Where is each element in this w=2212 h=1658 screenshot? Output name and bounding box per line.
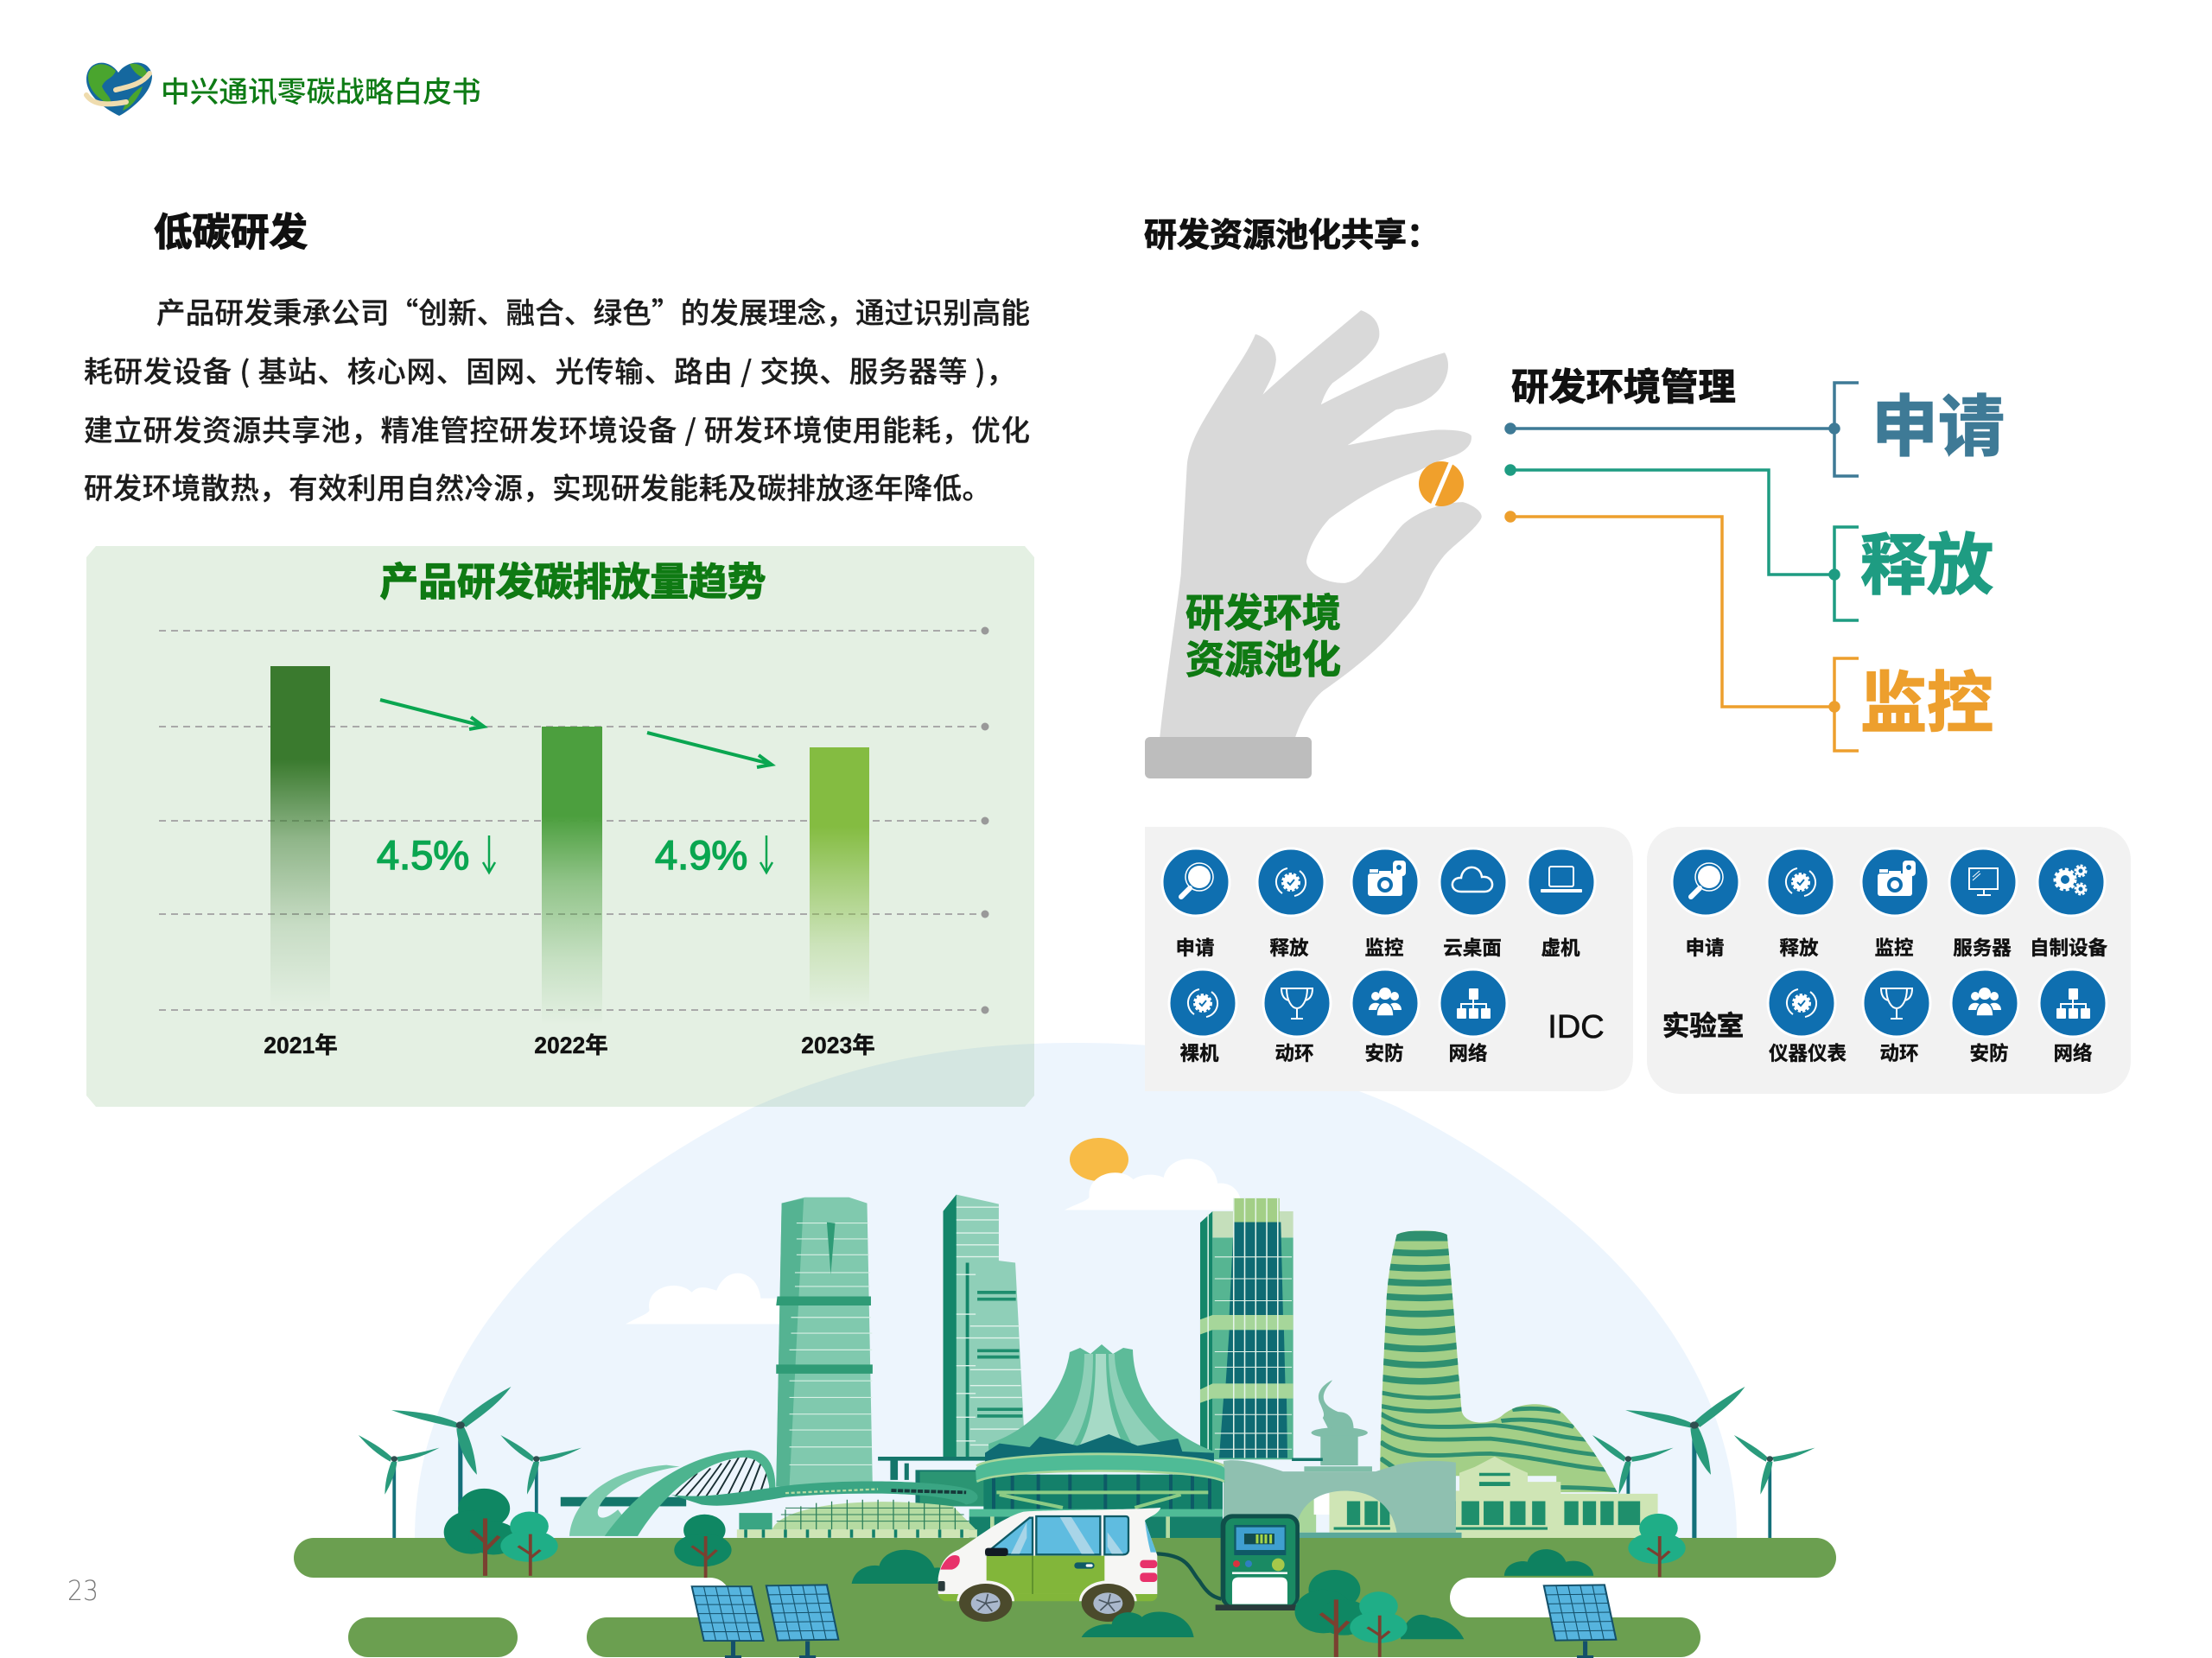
panel: IDC resource icons [1145, 827, 1633, 1091]
icon: elephant monument [1304, 1380, 1372, 1471]
panel: laboratory resource icons: 服务器 [1953, 937, 2012, 959]
foreground objects left [444, 1489, 955, 1657]
diagram: hand holding pill with management branches [1145, 310, 2005, 778]
report title: 中兴通讯零碳战略白皮书 [161, 76, 481, 109]
building: tower one [776, 1197, 873, 1487]
branch: monitor [1506, 512, 1993, 751]
icon: tree [674, 1515, 732, 1578]
panel: laboratory resource icons: 仪器仪表 [1769, 1043, 1847, 1064]
right skyline buildings [1200, 1198, 1658, 1539]
left skyline background [359, 1195, 1024, 1538]
icon: tree group [444, 1489, 558, 1576]
icon: hand [1160, 310, 1482, 739]
hall ring and colonnade [969, 1434, 1224, 1538]
icon: bushes [1401, 1549, 1593, 1639]
hall back beam [878, 1457, 1033, 1506]
body paragraph: 研发环境散热，有效利用自然冷源，实现研发能耗及碳排放逐年降低。 [84, 465, 991, 507]
arrow: 2021 to 2022 [380, 700, 484, 729]
chart: product R&D carbon emission bars [159, 562, 988, 1058]
bar: 2022 [542, 727, 602, 1025]
bridge beam [561, 1497, 686, 1506]
branch: apply [1506, 383, 2005, 476]
page number: 23 [67, 1574, 99, 1607]
panel: IDC resource icons: 释放 [1269, 937, 1309, 959]
panel: laboratory resource icons: 释放 [1779, 937, 1819, 959]
arrow: 2022 to 2023 [647, 733, 772, 767]
axis label: 2022: 2022年 [534, 1032, 608, 1058]
icon: bush [852, 1550, 955, 1584]
icon: sun [1070, 1138, 1128, 1181]
chart title: 产品研发碳排放量趋势 [380, 562, 766, 604]
header logo and report title [86, 62, 481, 116]
building: striped tower [1371, 1226, 1627, 1494]
car and charger [938, 1508, 1300, 1637]
heading: low-carbon R&D: 低碳研发 [154, 212, 308, 254]
bar: 2023 [810, 747, 869, 1011]
icon: tree group front [1294, 1570, 1408, 1657]
panel: laboratory resource icons: 自制设备 [2030, 937, 2107, 959]
foreground objects right [1294, 1514, 1686, 1657]
icon: wind turbines left [359, 1387, 582, 1538]
body paragraph: 耗研发设备 ( 基站、核心网、固网、光传输、路由 / 交换、服务器等 )， [84, 348, 1015, 391]
panel: laboratory resource icons: 监控 [1874, 937, 1914, 959]
body paragraph [84, 289, 1030, 507]
panel: laboratory resource icons: 动环 [1879, 1043, 1919, 1064]
building: glass tower [1200, 1198, 1294, 1459]
heading: R&D resource pooling: 研发资源池化共享： [1144, 218, 1440, 254]
panel: carbon emission trend background [86, 546, 1034, 1107]
panel: laboratory resource icons [1647, 827, 2131, 1094]
axis label: 2023: 2023年 [801, 1032, 875, 1058]
icon: left cloud [626, 1274, 780, 1324]
panel: IDC resource icons: 监控 [1364, 937, 1404, 959]
label: IDC: IDC [1548, 1009, 1605, 1045]
body paragraph: 建立研发资源共享池，精准管控研发环境设备 / 研发环境使用能耗，优化 [84, 407, 1030, 449]
label: resource pool: 研发环境 [1185, 591, 1341, 635]
body paragraph: 产品研发秉承公司“创新、融合、绿色”的发展理念，通过识别高能 [156, 289, 1030, 332]
panel: IDC resource icons: 申请 [1175, 937, 1215, 959]
building: convention hall [878, 1344, 1224, 1538]
label: apply: 申请 [1872, 391, 2005, 465]
bridge arches [569, 1450, 775, 1536]
icon: earth heart embraced by arms [86, 62, 152, 116]
gate base [1299, 1533, 1462, 1539]
ground: green strips [294, 1538, 1882, 1657]
building: palace [1296, 1457, 1658, 1539]
panel: IDC resource icons: 云桌面 [1443, 937, 1502, 959]
icon: solar panel three [1544, 1585, 1616, 1657]
illustration: sky dome [415, 1043, 1737, 1555]
branch: release [1506, 466, 1993, 620]
icon: right cloud [1065, 1159, 1241, 1210]
stadium [671, 1481, 978, 1538]
icon: charging cable [1156, 1553, 1221, 1599]
panel: laboratory resource icons: 申请 [1685, 937, 1725, 959]
icon: solar panel two [766, 1585, 838, 1657]
panel: IDC resource icons: 网络 [1448, 1042, 1488, 1064]
icon: orange pill [1419, 461, 1464, 506]
panel: IDC resource icons: 裸机 [1179, 1043, 1219, 1064]
label: release: 释放 [1860, 529, 1993, 603]
icon: bush in front of car [1082, 1611, 1194, 1637]
building: tower two [944, 1195, 1024, 1459]
label: R&D environment management: 研发环境管理 [1511, 367, 1736, 409]
panel: IDC resource icons: 动环 [1274, 1043, 1314, 1064]
bar: 2021 [270, 666, 330, 1012]
illustration: green city skyline [294, 1138, 1882, 1657]
icon: cuff [1145, 737, 1312, 778]
icon: solar panel one [692, 1586, 764, 1657]
icon: electric car [938, 1508, 1160, 1622]
axis label: 2021: 2021年 [264, 1032, 338, 1058]
panel: IDC resource icons: 虚机 [1541, 937, 1580, 959]
label: 4.5% decrease: 4.5% [377, 832, 469, 878]
icon: tree right [1628, 1514, 1686, 1577]
tent roof [988, 1344, 1214, 1469]
panel: laboratory resource icons: 安防 [1969, 1043, 2009, 1064]
panel: laboratory resource icons: 网络 [2053, 1042, 2093, 1064]
label: resource pool: 资源池化 [1185, 638, 1341, 682]
panel: IDC resource icons: 安防 [1364, 1043, 1404, 1064]
icon: charging station [1216, 1514, 1300, 1610]
label: monitor: 监控 [1860, 667, 1993, 741]
label: resource pool [1185, 591, 1341, 682]
building: bridge and stadium [561, 1450, 978, 1538]
icon: wind turbines right [1592, 1387, 1815, 1538]
label: laboratory: 实验室 [1662, 1010, 1744, 1041]
building: elephant gate [1224, 1460, 1456, 1533]
label: 4.9% decrease: 4.9% [655, 832, 747, 878]
